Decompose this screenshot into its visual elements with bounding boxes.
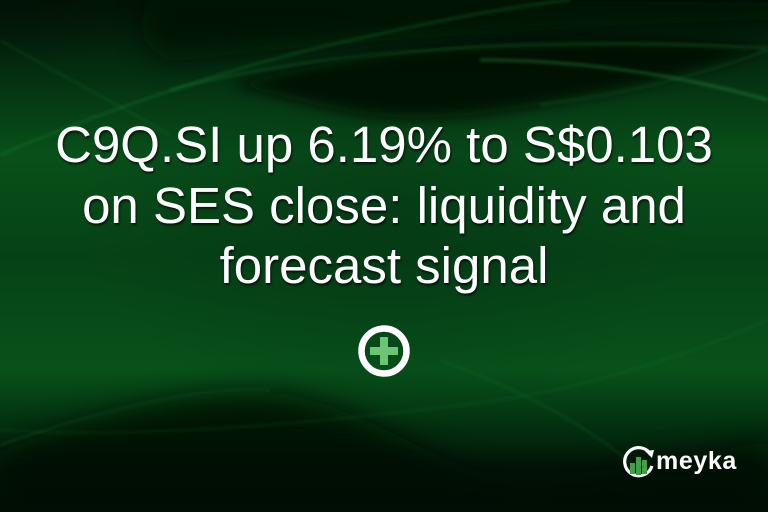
title: forecast signal [220, 237, 548, 294]
icon: logo mark [623, 446, 654, 478]
title: on SES close: liquidity and [82, 176, 686, 234]
logo: meyka [623, 446, 737, 478]
title: C9Q.SI up 6.19% to S$0.103 [55, 116, 713, 173]
logo wordmark: meyka [656, 447, 737, 475]
title [55, 116, 713, 296]
icon: plus in circle [358, 325, 410, 377]
